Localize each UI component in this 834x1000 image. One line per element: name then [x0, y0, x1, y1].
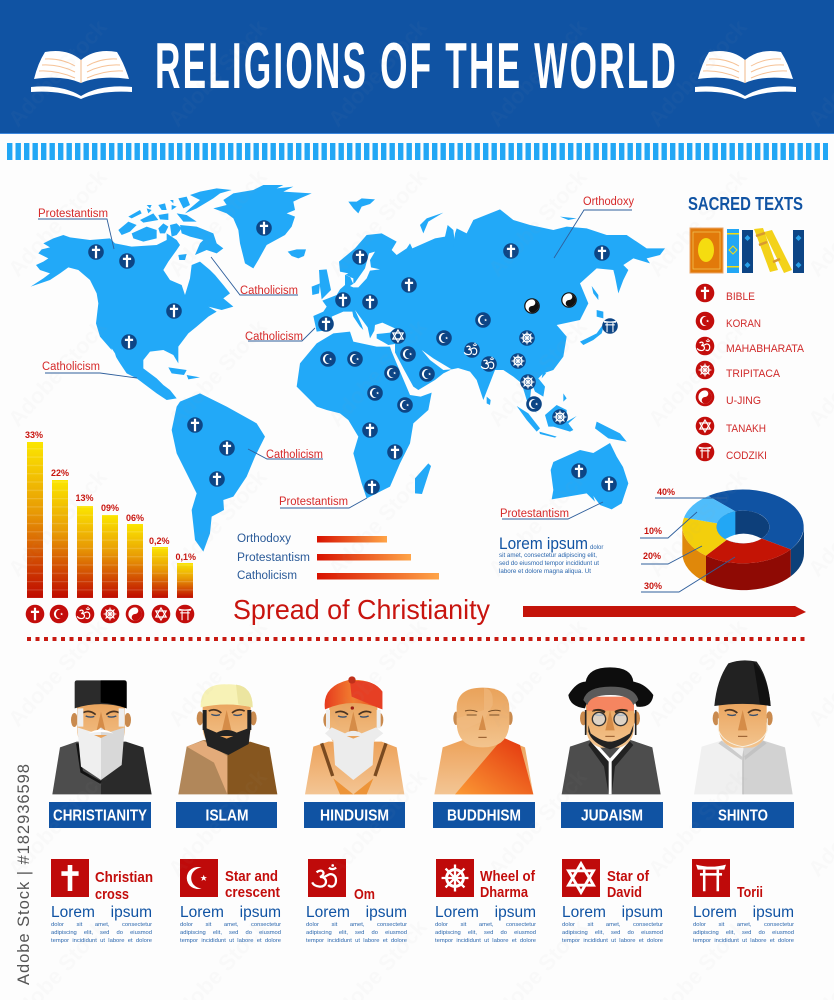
legend: texts: BIBLE: [726, 291, 755, 303]
stock watermark id: Adobe Stock | #182936598: [15, 764, 33, 985]
card: star of david: [562, 859, 663, 948]
label: shinto: [692, 802, 794, 828]
text block: lorem ipsum: [499, 534, 603, 575]
branch legend bars: [237, 533, 439, 582]
donut chart: [682, 489, 804, 590]
map callouts: Catholicism: [245, 331, 303, 343]
card: star of david: tempor incididunt ut labore et dolore: [562, 938, 663, 944]
card: torii: adipiscing elit, sed do eiusmod: [693, 930, 794, 936]
label: shinto: SHINTO: [718, 808, 768, 824]
map callouts: Orthodoxy: [583, 196, 634, 208]
sacred texts panel: [688, 194, 805, 462]
bar chart: followers share: 33%: [25, 430, 43, 440]
icon: open book left: [31, 51, 132, 99]
branch legend bars: Catholicism: [237, 570, 297, 582]
card: star of david: dolor sit amet, consectetur: [562, 922, 663, 928]
donut labels: 20%: [643, 551, 661, 561]
map callouts: Catholicism: [42, 361, 100, 373]
card: star and crescent: tempor incididunt ut labore et dolore: [180, 938, 281, 944]
label: christianity: CHRISTIANITY: [53, 808, 148, 824]
legend: texts: TRIPITACA: [726, 368, 781, 380]
donut labels: 10%: [644, 526, 662, 536]
label: judaism: JUDAISM: [581, 808, 643, 824]
card: star and crescent: crescent: [225, 884, 280, 901]
donut labels: 30%: [644, 581, 662, 591]
map callouts: Catholicism: [240, 285, 298, 297]
card: star and crescent: Star and: [225, 868, 278, 885]
figure: shinto priest: [694, 660, 793, 794]
card: wheel of dharma: Lorem ipsum: [435, 904, 536, 921]
card: wheel of dharma: [435, 859, 536, 948]
card: om: adipiscing elit, sed do eiusmod: [306, 930, 407, 936]
text block: lorem ipsum: sit amet, consectetur adipiscing elit,: [499, 552, 597, 559]
card: star and crescent: [180, 859, 281, 948]
label: hinduism: [304, 802, 405, 828]
card: om: dolor sit amet, consectetur: [306, 922, 407, 928]
map callouts: Protestantism: [500, 508, 569, 520]
card: star and crescent: Lorem ipsum: [180, 904, 281, 921]
figure: islam imam: [178, 684, 277, 794]
label: islam: [176, 802, 277, 828]
bar chart: followers share: 0,2%: [149, 536, 170, 546]
label: hinduism: HINDUISM: [320, 808, 389, 824]
world map: [31, 185, 665, 552]
legend: texts: [696, 284, 805, 462]
card: torii: Lorem ipsum: [693, 904, 794, 921]
card: om: Om: [354, 886, 375, 903]
figure: hinduism sage: [305, 676, 404, 794]
bar chart: followers share: 0,1%: [176, 552, 196, 562]
legend: texts: TANAKH: [726, 423, 766, 435]
card: torii: Torii: [737, 884, 763, 901]
donut labels: [640, 487, 735, 592]
header banner: [0, 0, 834, 134]
card: christian cross: [51, 859, 153, 948]
branch legend bars: Orthodoxy: [237, 533, 291, 545]
card: om: [306, 859, 407, 948]
dotted divider: [27, 637, 805, 641]
arrow: [523, 606, 806, 617]
card: star of david: Star of: [607, 868, 650, 885]
card: wheel of dharma: adipiscing elit, sed do eiusmod: [435, 930, 536, 936]
card: christian cross: tempor incididunt ut labore et dolore: [51, 938, 152, 944]
figure: buddhism monk: [434, 688, 533, 794]
heading: SACRED TEXTS: [688, 194, 803, 214]
map pins: [88, 220, 618, 495]
card: om: tempor incididunt ut labore et dolore: [306, 938, 407, 944]
legend: texts: KORAN: [726, 318, 761, 330]
bar chart: followers share: 13%: [76, 493, 94, 503]
bar chart: followers share: [25, 430, 196, 623]
card: christian cross: dolor sit amet, consectetur: [51, 922, 152, 928]
figure: judaism rabbi: [562, 667, 661, 794]
card: christian cross: cross: [95, 886, 129, 903]
legend: texts: U-JING: [726, 395, 761, 407]
card: wheel of dharma: Dharma: [480, 884, 529, 901]
card: star of david: adipiscing elit, sed do eiusmod: [562, 930, 663, 936]
books illustration: [690, 228, 804, 273]
label: judaism: [561, 802, 663, 828]
legend: texts: CODZIKI: [726, 450, 767, 462]
card: christian cross: Lorem ipsum: [51, 904, 152, 921]
map callouts: Catholicism: [266, 449, 323, 461]
card: torii: tempor incididunt ut labore et dolore: [693, 938, 794, 944]
text block: lorem ipsum: Lorem ipsum: [499, 534, 588, 553]
card: christian cross: Christian: [95, 869, 153, 886]
card: star of david: Lorem ipsum: [562, 904, 663, 921]
map callouts: Protestantism: [279, 496, 348, 508]
card: wheel of dharma: dolor sit amet, consectetur: [435, 922, 536, 928]
label: christianity: [49, 802, 151, 828]
striped band: [7, 143, 828, 160]
card: star of david: David: [607, 884, 642, 901]
section title: Spread of Christianity: [233, 594, 490, 625]
card: om: Lorem ipsum: [306, 904, 407, 921]
text block: lorem ipsum: sed do eiusmod tempor incididunt ut: [499, 560, 599, 567]
card: star and crescent: adipiscing elit, sed do eiusmod: [180, 930, 281, 936]
map callouts: [38, 196, 634, 520]
bar chart: followers share: 06%: [126, 513, 144, 523]
donut labels: 40%: [657, 487, 675, 497]
figure: christianity priest: [52, 680, 152, 794]
text block: lorem ipsum: labore et dolore magna aliqua. Ut: [499, 568, 591, 575]
card: wheel of dharma: Wheel of: [480, 868, 536, 885]
map callouts: Protestantism: [38, 208, 108, 220]
bar chart: followers share: 09%: [101, 503, 119, 513]
bar chart: followers share: 22%: [51, 468, 69, 478]
card: wheel of dharma: tempor incididunt ut labore et dolore: [435, 938, 536, 944]
card: torii: dolor sit amet, consectetur: [693, 922, 794, 928]
label: buddhism: BUDDHISM: [447, 808, 521, 824]
legend: texts: MAHABHARATA: [726, 343, 805, 355]
card: star and crescent: dolor sit amet, consectetur: [180, 922, 281, 928]
card: christian cross: adipiscing elit, sed do eiusmod: [51, 930, 152, 936]
text block: lorem ipsum: dolor: [590, 545, 603, 551]
card: torii: [692, 859, 794, 948]
branch legend bars: Protestantism: [237, 552, 310, 564]
icon: open book right: [695, 51, 796, 99]
label: buddhism: [433, 802, 535, 828]
label: islam: ISLAM: [206, 808, 248, 824]
